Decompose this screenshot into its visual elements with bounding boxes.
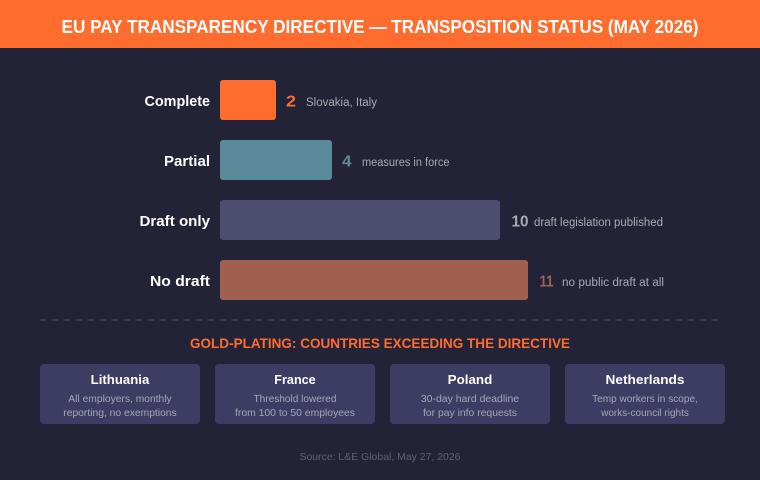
- panel: France: Threshold lowered: [254, 393, 337, 405]
- row: partial: measures in force: [362, 157, 450, 169]
- title: EU PAY TRANSPARENCY DIRECTIVE — TRANSPOSITION STATUS (MAY 2026): [62, 17, 698, 37]
- panel: Netherlands: Temp workers in scope,: [592, 393, 698, 405]
- panel: Lithuania: All employers, monthly: [68, 393, 172, 405]
- panel: Lithuania: Lithuania: [91, 372, 150, 387]
- row: no draft: no public draft at all: [562, 277, 664, 289]
- panel: France: France: [274, 372, 316, 387]
- row: no draft: No draft: [150, 273, 210, 290]
- panel: Lithuania: [40, 364, 200, 424]
- panel: Poland: 30-day hard deadline: [421, 393, 519, 405]
- panel: Netherlands: works-council rights: [600, 407, 689, 419]
- row: draft only: Draft only: [140, 213, 211, 230]
- title banner: [0, 0, 760, 48]
- row: complete: Slovakia, Italy: [306, 97, 377, 109]
- row: draft only: draft legislation published: [534, 217, 663, 229]
- row: complete: 2: [286, 94, 296, 110]
- row: partial: Partial: [164, 153, 210, 170]
- row: partial: [164, 140, 450, 180]
- panel: Poland: for pay info requests: [423, 407, 517, 419]
- panel: Poland: [390, 364, 550, 424]
- panel: Netherlands: [565, 364, 725, 424]
- row: partial: 4: [342, 154, 352, 170]
- source note: Source: L&E Global, May 27, 2026: [300, 451, 461, 463]
- heading: gold-plating: GOLD-PLATING: COUNTRIES EXCEEDING THE DIRECTIVE: [190, 335, 570, 351]
- row: no draft: [150, 260, 664, 300]
- row: complete: Complete: [144, 93, 210, 110]
- row: draft only: 10: [512, 214, 529, 230]
- row: no draft: 11: [540, 274, 554, 290]
- row: draft only: [140, 200, 663, 240]
- panel: Netherlands: Netherlands: [606, 372, 684, 387]
- panel: France: [215, 364, 375, 424]
- bar chart: transposition status: [140, 80, 664, 300]
- panel: France: from 100 to 50 employees: [235, 407, 355, 419]
- row: complete: [144, 80, 377, 120]
- panel: Lithuania: reporting, no exemptions: [63, 407, 177, 419]
- panel: Poland: Poland: [448, 372, 492, 387]
